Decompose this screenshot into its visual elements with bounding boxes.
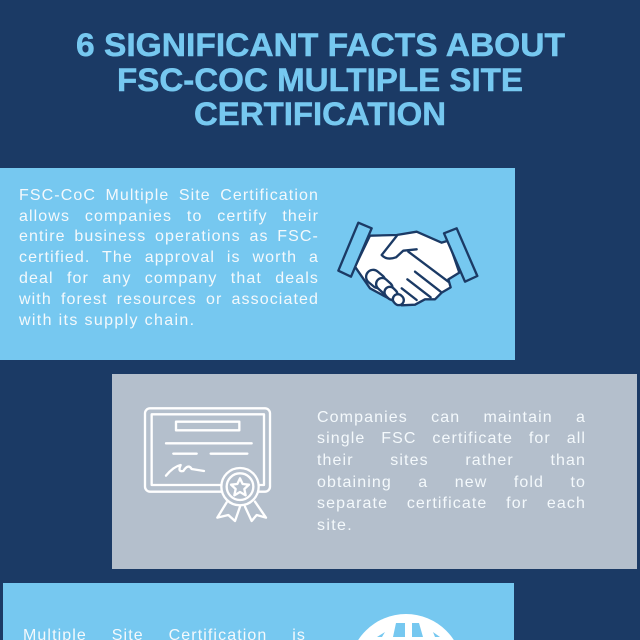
- title: [76, 27, 565, 132]
- text block: fact 2: single FSC certificate for all: [317, 430, 586, 447]
- text block: fact 2: site.: [317, 517, 353, 534]
- panel: fact 1: [0, 168, 515, 360]
- text block: fact 2: obtaining a new fold to: [317, 474, 586, 491]
- icon: handshake: [337, 222, 478, 306]
- text block: fact 1: entire business operations as FSC-: [19, 228, 319, 245]
- text block: fact 2: Companies can maintain a: [317, 409, 586, 426]
- text block: fact 2: their sites rather than: [317, 452, 586, 469]
- text block: fact 1: FSC-CoC Multiple Site Certification: [19, 187, 319, 204]
- icon: certificate: [144, 407, 272, 522]
- text block: fact 1: allows companies to certify their: [19, 208, 319, 225]
- title: 6 SIGNIFICANT FACTS ABOUT: [76, 27, 565, 63]
- icon: globe: [358, 614, 454, 640]
- text block: fact 1: with forest resources or associated: [19, 291, 319, 308]
- text block: fact 2: separate certificate for each: [317, 495, 586, 512]
- text block: fact 1: deal for any company that deals: [19, 270, 319, 287]
- panel: fact 3: [3, 583, 514, 640]
- text block: fact 1: [19, 187, 319, 329]
- text block: fact 1: certified. The approval is worth a: [19, 249, 319, 266]
- title: CERTIFICATION: [194, 96, 446, 132]
- text block: fact 2: [317, 409, 586, 534]
- title: FSC-COC MULTIPLE SITE: [117, 62, 523, 98]
- text block: fact 1: with its supply chain.: [19, 312, 195, 329]
- panel: fact 2: [112, 374, 637, 569]
